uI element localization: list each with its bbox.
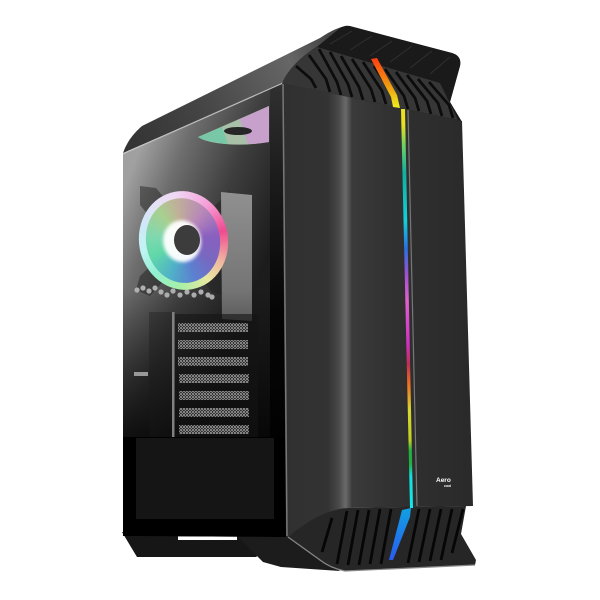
- left bracket: [134, 312, 174, 437]
- fan hub: [174, 225, 200, 255]
- drive plate: [221, 192, 252, 321]
- darkening of lower glass: [123, 305, 270, 437]
- bottom fins: [288, 506, 476, 571]
- RGB light strip: bottom section: [389, 508, 411, 560]
- rear fan frame: [136, 186, 232, 296]
- rear fan: [138, 191, 228, 290]
- brand logo: [436, 477, 451, 488]
- glass side panel: [123, 82, 287, 540]
- rear feet: [122, 532, 340, 571]
- front panel: [282, 83, 473, 537]
- side frame dark strip: [270, 86, 285, 437]
- expansion slot covers: [175, 314, 252, 434]
- brand logo: cool: [444, 484, 451, 488]
- RGB light strip: vertical section: [401, 109, 413, 508]
- roof panel: [123, 26, 462, 153]
- PC case illustration: [122, 26, 476, 572]
- honeycomb vent: [134, 285, 215, 300]
- top fan: [198, 106, 269, 145]
- brand logo: Aero: [436, 477, 451, 484]
- top fins: [282, 26, 462, 122]
- lower shroud: [123, 437, 287, 537]
- RGB light strip: top section: [371, 58, 400, 108]
